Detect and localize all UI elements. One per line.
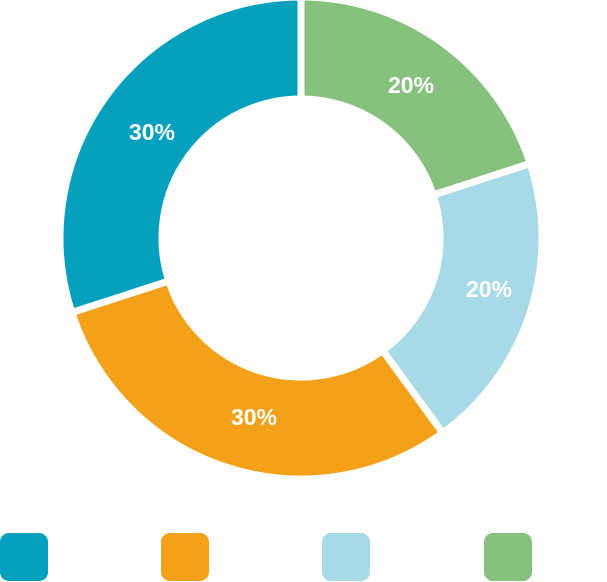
legend swatch: light blue <box>322 533 370 581</box>
legend swatch: orange <box>161 533 209 581</box>
segment: orange 30% <box>72 281 443 479</box>
segment: teal 30% <box>60 0 301 312</box>
legend <box>0 533 532 581</box>
label: teal 30%: 30% <box>129 119 175 145</box>
label: green 20%: 20% <box>388 72 434 98</box>
segment: green 20% <box>301 0 530 195</box>
label: light blue 20%: 20% <box>466 276 512 302</box>
donut chart <box>60 0 542 479</box>
legend swatch: green <box>484 533 532 581</box>
label: orange 30%: 30% <box>231 404 277 430</box>
legend swatch: teal <box>0 533 48 581</box>
segment: light blue 20% <box>383 164 542 433</box>
